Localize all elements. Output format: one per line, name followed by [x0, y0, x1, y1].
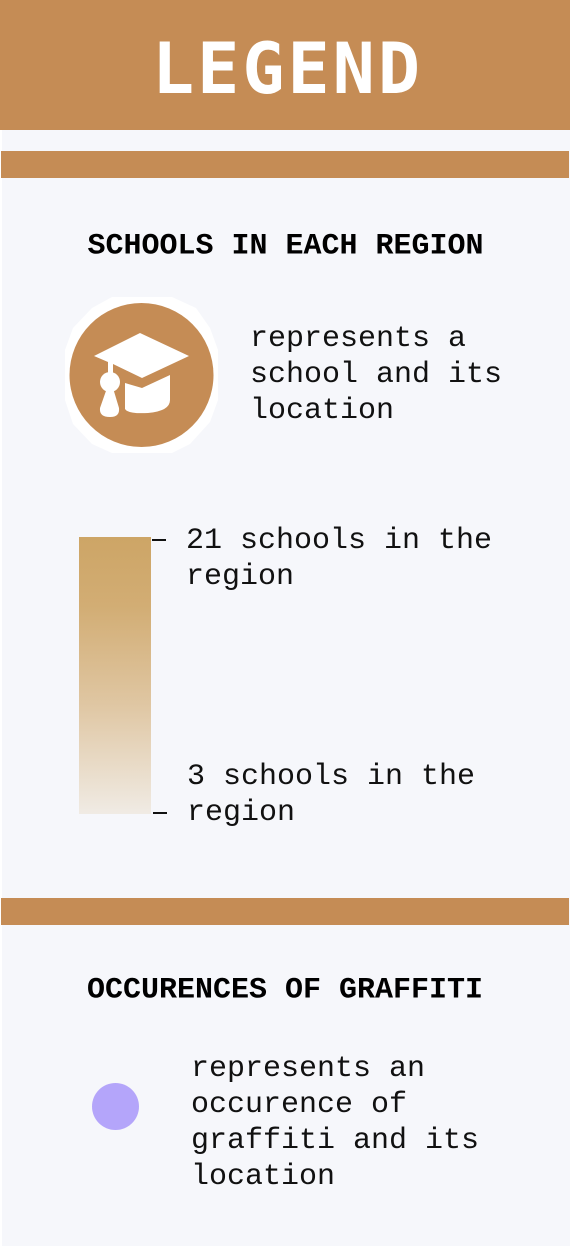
divider bar: schools — [1, 151, 569, 178]
heading: schools in each region: SCHOOLS IN EACH REGION — [87, 230, 484, 264]
divider bar: graffiti — [1, 898, 569, 925]
text: school icon description: location — [250, 394, 394, 428]
text: scale minimum: 3 schools in the — [187, 760, 475, 794]
text: graffiti description: location — [191, 1160, 335, 1194]
text: graffiti description: occurence of — [191, 1088, 407, 1122]
text: scale maximum: 21 schools in the — [186, 524, 492, 558]
title banner — [0, 0, 570, 130]
icon: graffiti dot — [92, 1083, 139, 1130]
scale tick: bottom — [153, 812, 167, 814]
text: scale minimum: region — [187, 796, 295, 830]
heading: occurences of graffiti: OCCURENCES OF GRAFFITI — [87, 974, 483, 1008]
icon: graduation cap school marker — [65, 297, 218, 453]
text: scale maximum: region — [186, 560, 294, 594]
gradient scale bar — [79, 537, 151, 814]
text: school icon description: represents a — [250, 322, 466, 356]
text: school icon description: school and its — [250, 358, 502, 392]
title banner: LEGEND — [152, 28, 420, 110]
text: graffiti description: graffiti and its — [191, 1124, 479, 1158]
scale tick: top — [152, 539, 166, 541]
text: graffiti description: represents an — [191, 1052, 425, 1086]
